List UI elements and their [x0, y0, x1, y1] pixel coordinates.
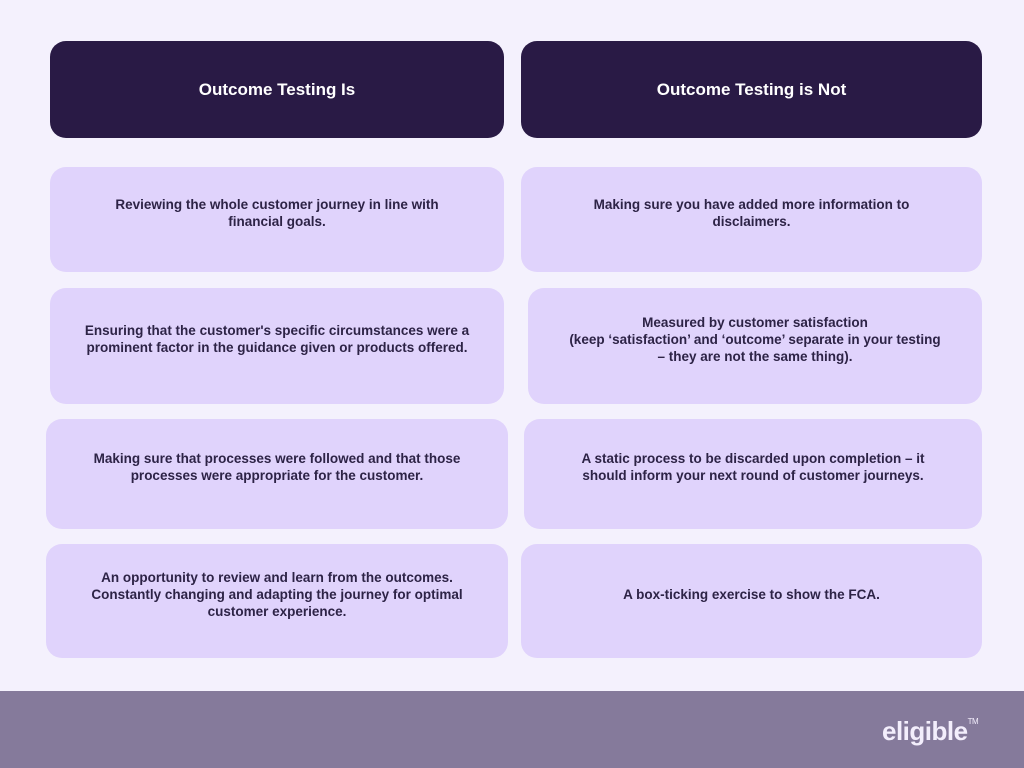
card: not 1: disclaimers.: [712, 214, 791, 228]
card: not 4: [521, 544, 982, 658]
card: is 1: financial goals.: [228, 214, 326, 228]
card: is 4: An opportunity to review and learn from the outcomes.: [101, 570, 453, 584]
header: outcome testing is not: [521, 41, 982, 138]
card: is 2: [50, 288, 504, 404]
card: is 3: processes were appropriate for the customer.: [131, 468, 423, 483]
card: is 3: Making sure that processes were followed and that those: [94, 451, 460, 466]
card: is 3: [46, 419, 508, 529]
card: not 4: A box-ticking exercise to show the FCA.: [623, 586, 880, 602]
card: is 4: [46, 544, 508, 658]
card: not 1: Making sure you have added more information to: [594, 196, 909, 212]
card: is 2: Ensuring that the customer's specific circumstances were a prominent factor in the guidance given or products offered.: [85, 323, 469, 355]
card: not 2: – they are not the same thing).: [657, 348, 853, 364]
logo: eligible: eligibleTM: [882, 716, 978, 746]
header: outcome testing is: [50, 41, 504, 138]
card: is 4: Constantly changing and adapting the journey for optimal: [91, 586, 463, 602]
card: not 2: (keep ‘satisfaction’ and ‘outcome’ separate in your testing: [569, 332, 941, 346]
card: not 2: [528, 288, 982, 404]
card: is 1: [50, 167, 504, 272]
card: not 3: A static process to be discarded upon completion – it: [581, 451, 925, 466]
card: not 1: [521, 167, 982, 272]
card: not 3: [524, 419, 982, 529]
card: not 2: Measured by customer satisfaction: [642, 314, 868, 330]
card: is 4: customer experience.: [208, 604, 346, 618]
card: is 1: Reviewing the whole customer journey in line with: [115, 196, 439, 212]
card: not 3: should inform your next round of customer journeys.: [582, 468, 924, 483]
header: outcome testing is: Outcome Testing Is: [199, 80, 355, 98]
header: outcome testing is not: Outcome Testing is Not: [657, 80, 846, 98]
footer band: [0, 691, 1024, 768]
